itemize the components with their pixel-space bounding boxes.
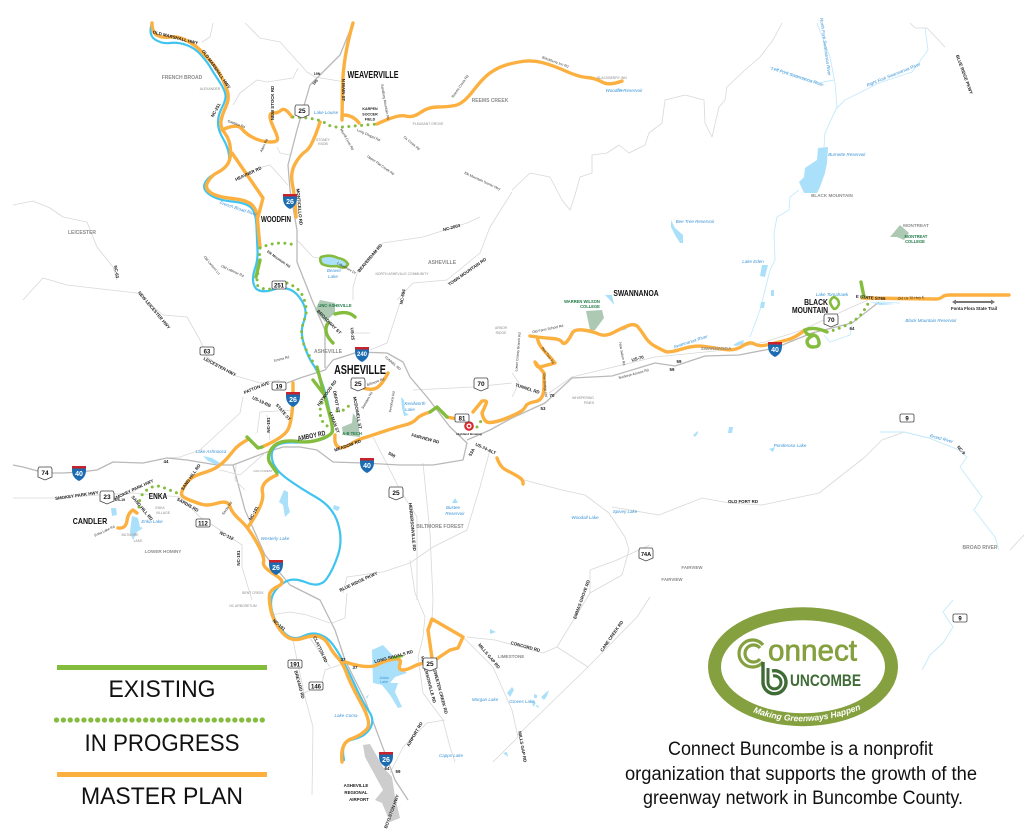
road and place labels: 44	[164, 459, 169, 464]
road and place labels: MONTICELLO RD	[295, 188, 304, 225]
road and place labels: MEADOW RD	[333, 438, 362, 453]
road and place labels: HENDERSONVILLE RD	[408, 503, 417, 551]
road and place labels: SMOKEY PARK HWY	[55, 490, 99, 501]
arrow: Fonta Flora State Trail	[952, 300, 995, 304]
road and place labels: SWEETEN CREEK RD	[432, 669, 449, 714]
road and place labels: Lower Grassy Branch Rd	[514, 332, 522, 372]
description text	[625, 739, 977, 809]
road and place labels: SMOKEY PARK HWY	[112, 478, 154, 501]
state route shield numbers: 9	[958, 616, 962, 622]
road and place labels: CONCORD RD	[510, 640, 541, 653]
road and place labels: Blackberry Inn Rd	[542, 55, 569, 69]
road and place labels: MONTREAT	[903, 223, 929, 228]
road and place labels: DEPOT ST	[332, 390, 341, 413]
road and place labels: Gabbles Rd	[227, 119, 246, 129]
road and place labels: NORTH ASHEVILLE COMMUNITY	[375, 272, 429, 276]
road and place labels: Lake	[380, 680, 388, 684]
road and place labels: Woodfin Reservoir	[605, 88, 643, 93]
US route shield numbers: 74	[41, 470, 49, 477]
Beaver Lake ring	[320, 256, 348, 268]
road and place labels: BROAD RIVER	[962, 545, 998, 551]
road and place labels: Long Chapel Rd	[356, 128, 381, 142]
icon: b ring	[763, 662, 786, 694]
description text: Connect Buncombe is a nonprofit	[668, 739, 934, 760]
road and place labels: Lake	[328, 274, 338, 279]
road and place labels: BILTMORE FOREST	[416, 524, 464, 530]
road and place labels: BLACK MOUNTAIN	[811, 193, 854, 198]
description text: organization that supports the growth of the	[625, 764, 977, 785]
road and place labels: LEICESTER HWY	[203, 356, 237, 377]
US route shield numbers: 70	[827, 317, 835, 324]
road and place labels: NC-2003	[442, 223, 461, 232]
US route shield numbers	[41, 108, 835, 668]
US route shield numbers: 25	[298, 108, 306, 115]
legend: existing	[57, 665, 267, 703]
road and place labels: Lakeshore Dr	[336, 261, 357, 276]
road and place labels: AIRPORT	[349, 797, 369, 802]
road and place labels: Buckeye Access Rd	[618, 368, 649, 380]
road and place labels: KNOB	[318, 142, 329, 146]
road and place labels: Reems Creek Rd	[451, 74, 470, 99]
road and place labels: NC-191	[236, 550, 241, 566]
road and place labels: NC ARBORETUM	[229, 604, 257, 608]
road and place labels: Ox Creek Rd	[403, 135, 421, 151]
road and place labels: Beaver	[327, 268, 342, 273]
road and place labels: 19S	[312, 78, 319, 86]
road and place labels: 53	[541, 406, 546, 411]
road and place labels: OAK FOREST	[253, 469, 273, 473]
road and place labels: NC-191	[266, 417, 271, 433]
road and place labels: FAIRVIEW RD	[411, 432, 440, 445]
road and place labels: KARPEN	[362, 107, 378, 111]
road and place labels: UNC-ASHEVILLE	[318, 303, 352, 308]
road and place labels: PLEASANT GROVE	[413, 122, 444, 126]
road and place labels: Old Lattimer Rd	[220, 264, 244, 278]
road and place labels: BEAVERDAM RD	[357, 243, 383, 273]
road and place labels: Right Fork Swannanoa River	[866, 61, 922, 88]
road and place labels: NC-694	[399, 288, 406, 305]
road and place labels: ALEXANDER	[200, 87, 221, 91]
road and place labels: Julian	[378, 676, 389, 680]
description text: greenway network in Buncombe County.	[643, 788, 963, 809]
road and place labels: BROADWAY ST	[316, 309, 343, 335]
road and place labels: 53A	[468, 447, 476, 457]
road and place labels: Groves Lake	[509, 699, 535, 704]
road and place labels: BLUE RIDGE PKWY	[955, 54, 974, 95]
state route shield numbers: 81	[459, 416, 466, 422]
road and place labels: Burnette Reservoir	[828, 152, 866, 157]
road and place labels: STATE ST	[275, 403, 292, 422]
road and place labels: Black Mountain Reservoir	[905, 318, 957, 323]
road and place labels: Old Lantern Ln	[203, 255, 221, 276]
road and place labels: US-19	[115, 498, 125, 502]
road and place labels: MILLS GAP RD	[477, 642, 501, 670]
road and place labels: HENDERSONVILLE RD	[420, 656, 437, 703]
road and place labels: TUNNEL RD	[384, 355, 402, 372]
road and place labels: SWANNANOA	[701, 346, 732, 351]
road and place labels: CLAYTON RD	[312, 635, 329, 663]
US route shield numbers: 23	[103, 494, 111, 501]
road and place labels: Bee Tree Rd	[541, 346, 555, 365]
state route shield numbers: 112	[198, 522, 208, 528]
road and place labels: US-19-BB	[251, 395, 272, 408]
road and place labels: SWANNANOA	[613, 288, 659, 298]
interstate shields: 40	[771, 347, 779, 354]
road and place labels: Sandburg Mountain Rd	[380, 84, 390, 120]
road and place labels: Lake Coma	[334, 713, 358, 718]
road and place labels: WEAVERVILLE	[347, 69, 399, 80]
state route shield numbers: 146	[311, 684, 322, 690]
interstate shields: 240	[357, 352, 368, 358]
road and place labels: 59	[396, 769, 401, 774]
state route shield numbers: 191	[290, 662, 301, 668]
road and place labels: MILLS GAP RD	[517, 731, 528, 763]
road and place labels: French Broad River	[219, 200, 258, 217]
road and place labels: LONG SHOALS RD	[374, 649, 413, 664]
road and place labels: Westerly Lake	[261, 536, 290, 541]
road and place labels: PATTON AVE	[243, 380, 270, 395]
road and place labels: ENKA	[149, 491, 168, 501]
logo: Connect Buncombe	[708, 607, 898, 726]
road and place labels: PINES	[584, 401, 595, 405]
road and place labels: Merrill Cove Rd	[339, 128, 355, 151]
US route shield numbers: 74A	[641, 552, 651, 558]
road and place labels: VILLAGE	[156, 511, 171, 515]
road and place labels: Ponderosa Lake	[774, 443, 807, 448]
campus areas	[315, 225, 909, 437]
road and place labels: NC-191	[272, 618, 287, 632]
road and place labels: LOWER HOMINY	[145, 549, 181, 554]
road and place labels: North Fork Swannanoa River	[819, 18, 832, 76]
state route shield numbers: 251	[274, 284, 285, 290]
interstate shields: 26	[286, 199, 294, 206]
existing routes	[247, 256, 864, 658]
road and place labels: Biltmore Rd	[366, 377, 385, 387]
road and place labels: CANE CREEK RD	[599, 620, 624, 653]
interstate shields: 26	[272, 565, 280, 572]
road and place labels: BOYLSTON HWY	[383, 794, 400, 829]
road and place labels: ENKA	[155, 506, 165, 510]
US route shield numbers: 70	[477, 381, 485, 388]
logo: Connect Buncombe: UNCOMBE	[790, 671, 861, 690]
US route shield numbers: 25	[354, 381, 362, 388]
road and place labels: WOODFIN	[261, 215, 291, 224]
logo: Connect Buncombe: Making Greenways Happen	[753, 705, 860, 722]
road and place labels: Emma Rd	[274, 355, 290, 363]
state route shield numbers	[198, 284, 962, 690]
road and place labels: Morgan Lake	[472, 697, 499, 702]
in-progress routes	[139, 117, 870, 507]
road and place labels: SAND HILL RD	[180, 463, 202, 491]
legend: existing: EXISTING	[108, 676, 216, 703]
road and place labels: TOWN MOUNTAIN RD	[447, 257, 487, 287]
road and place labels: Kenilworth	[404, 401, 426, 406]
road and place labels: Lake Louise	[314, 110, 339, 115]
road and place labels: Reservoir	[445, 511, 465, 516]
road and place labels: 19N	[314, 72, 321, 76]
road and place labels: NEW STOCK RD	[270, 86, 275, 120]
road and place labels: NEW LEICESTER HWY	[137, 290, 171, 330]
road and place labels: Lake Ashnooca	[196, 449, 227, 454]
state route shields	[196, 281, 967, 690]
road and place labels: 37	[341, 657, 346, 662]
road and place labels: TUNNEL RD	[515, 382, 540, 395]
road and place labels: Swannanoa River	[673, 334, 709, 349]
road and place labels: NC-191	[248, 505, 260, 521]
road and place labels: Enka Lake Rd	[94, 525, 115, 538]
road and place labels: N MAIN ST	[341, 79, 346, 102]
road and place labels: OLD MARSHALL HWY	[201, 49, 232, 90]
road and place labels: 64	[385, 766, 390, 771]
road and place labels: Old Farm School Rd	[532, 324, 564, 334]
road and place labels: MONTREAT	[905, 234, 928, 239]
road and place labels: NC-63	[113, 265, 120, 279]
road and place labels: Old Us 70 Hwy E	[898, 295, 925, 301]
road and place labels: Bee Tree Reservoir	[676, 219, 715, 224]
logo: Connect Buncombe: onnect	[768, 634, 858, 668]
road and place labels: LAKE	[134, 539, 143, 543]
road and place labels: COLLEGE	[905, 239, 925, 244]
road and place labels: NC-9	[956, 445, 967, 456]
legend: master plan	[57, 772, 267, 810]
US route shield numbers: 25	[426, 661, 434, 668]
icon: Highland Brewing	[464, 421, 474, 431]
road and place labels: Fonta Flora State Trail	[951, 306, 997, 311]
interstate shields: 40	[363, 463, 371, 470]
road and place labels: New Salem Rd	[618, 342, 626, 366]
road and place labels: US-74-ALT	[475, 442, 497, 456]
airport	[363, 744, 400, 822]
road and place labels: LYMAN ST	[328, 411, 341, 434]
road and place labels: Sweeten Rd	[361, 391, 374, 410]
road and place labels: BLUE RIDGE PKWY	[339, 571, 378, 593]
road and place labels: Sardis Rd	[221, 501, 233, 516]
road and place labels: FAIRVIEW	[681, 565, 703, 570]
road and place labels: 37	[353, 665, 358, 670]
road and place labels: SAND HILL RD	[130, 495, 154, 521]
road and place labels: Bustee	[446, 505, 460, 510]
road and place labels: NC-112	[219, 530, 235, 541]
road and place labels: 65	[881, 296, 886, 301]
icon: C ring	[739, 640, 763, 667]
state route shield numbers: 9	[905, 416, 909, 422]
road and place labels: OLD MARSHALL HWY	[152, 29, 199, 46]
road and place labels: Lake	[405, 407, 415, 412]
US route shield numbers: 25	[392, 490, 400, 497]
road and place labels: ASHEVILLE	[428, 260, 457, 266]
interstates	[13, 23, 879, 800]
road and place labels: BENT CREEK	[242, 591, 265, 595]
road and place labels: Spivey Lake	[613, 509, 638, 514]
road and place labels: Glen Bridge Rd	[542, 373, 548, 397]
road and place labels: 64	[850, 326, 855, 331]
road and place labels: Left Fork Swannanoa River	[771, 66, 825, 88]
road and place labels: BLACKBERRY INN	[597, 76, 627, 80]
interstate shields: 26	[382, 757, 390, 764]
road and place labels: WHISPERING	[572, 396, 594, 400]
road and place labels: BLACK	[804, 297, 828, 307]
interstate shields	[72, 194, 782, 767]
road and place labels: FRENCH BROAD	[162, 75, 203, 81]
road and place labels: CANDLER	[73, 516, 108, 526]
road and place labels: US-70	[631, 354, 645, 363]
logo tagline	[750, 708, 864, 721]
legend: master plan: MASTER PLAN	[81, 783, 243, 810]
road and place labels: Lake Tomahawk	[816, 292, 849, 297]
road and place labels: NC-251	[210, 102, 222, 118]
road and place labels: 508	[387, 451, 397, 459]
road and place labels: ARBOR	[495, 326, 508, 330]
road and place labels: Elk Mountain Scenic Hwy	[464, 171, 501, 191]
road and place labels: STONEY	[316, 138, 331, 142]
road and place labels: Highland Brewing	[456, 432, 482, 436]
road and place labels: Aiken Rd	[259, 138, 269, 153]
road and place labels: 70	[550, 393, 555, 398]
interstate shields: 26	[289, 397, 297, 404]
road and place labels: Lake Eden	[742, 259, 764, 264]
road and place labels: Woodall Lake	[571, 515, 599, 520]
master plan routes	[118, 23, 1009, 762]
legend: in progress: IN PROGRESS	[84, 730, 240, 757]
river: French Broad	[151, 23, 372, 760]
road and place labels: Enka Lake	[141, 519, 163, 524]
interstate shields: 40	[75, 471, 83, 478]
road and place labels: ASHEVILLE	[314, 349, 343, 355]
road and place labels: COLLEGE	[580, 304, 600, 309]
road and place labels: LIMESTONE	[498, 654, 524, 659]
road and place labels: HAYWOOD RD	[316, 379, 338, 407]
road and place labels: E STATE ST	[856, 294, 881, 301]
lakes	[111, 89, 895, 757]
road and place labels: REEMS CREEK	[472, 98, 509, 104]
road and place labels: Broad River	[929, 433, 954, 444]
road and place labels: 59	[677, 359, 682, 364]
road and place labels: BILTMORE	[121, 533, 139, 537]
road and place labels: 59	[670, 367, 675, 372]
road and place labels: ASHEVILLE	[344, 783, 368, 788]
road and place labels: EMMAS GROVE RD	[572, 579, 591, 620]
road and place labels: OLD FORT RD	[728, 499, 758, 504]
US route shields	[38, 105, 838, 671]
state route shield numbers: 63	[204, 350, 211, 356]
road and place labels: MCDOWELL ST	[352, 396, 363, 430]
road and place labels: AIRPORT RD	[406, 721, 424, 747]
road and place labels: SARDIS RD	[176, 496, 199, 513]
road and place labels: ASHEVILLE	[334, 364, 386, 377]
legend	[56, 665, 267, 810]
state route shield numbers: 19	[276, 384, 283, 390]
road and place labels: BREVARD RD	[293, 670, 306, 699]
rivers	[750, 23, 999, 670]
road and place labels: LEICESTER	[68, 230, 96, 236]
road and place labels: MOUNTAIN	[792, 305, 828, 315]
road and place labels: Fernihurst Rd	[388, 391, 396, 413]
road and place labels: Capps Lake	[439, 753, 463, 758]
road and place labels: A-B TECH	[342, 431, 362, 436]
road and place labels: Upper Flat Creek Rd	[366, 154, 395, 176]
road and place labels: SOCCER	[362, 112, 378, 116]
road and place labels: FIELD	[365, 118, 376, 122]
road and place labels: Elk Mountain Rd	[266, 250, 291, 269]
road and place labels: REGIONAL	[344, 790, 368, 795]
road and place labels: RIDGE	[496, 331, 507, 335]
road and place labels: AMBOY RD	[297, 429, 327, 443]
road and place labels: HEAVNER RD	[234, 165, 262, 182]
road and place labels: WARREN WILSON	[564, 299, 600, 304]
road and place labels: US-25	[349, 327, 356, 341]
road and place labels: FAIRVIEW	[661, 577, 683, 582]
